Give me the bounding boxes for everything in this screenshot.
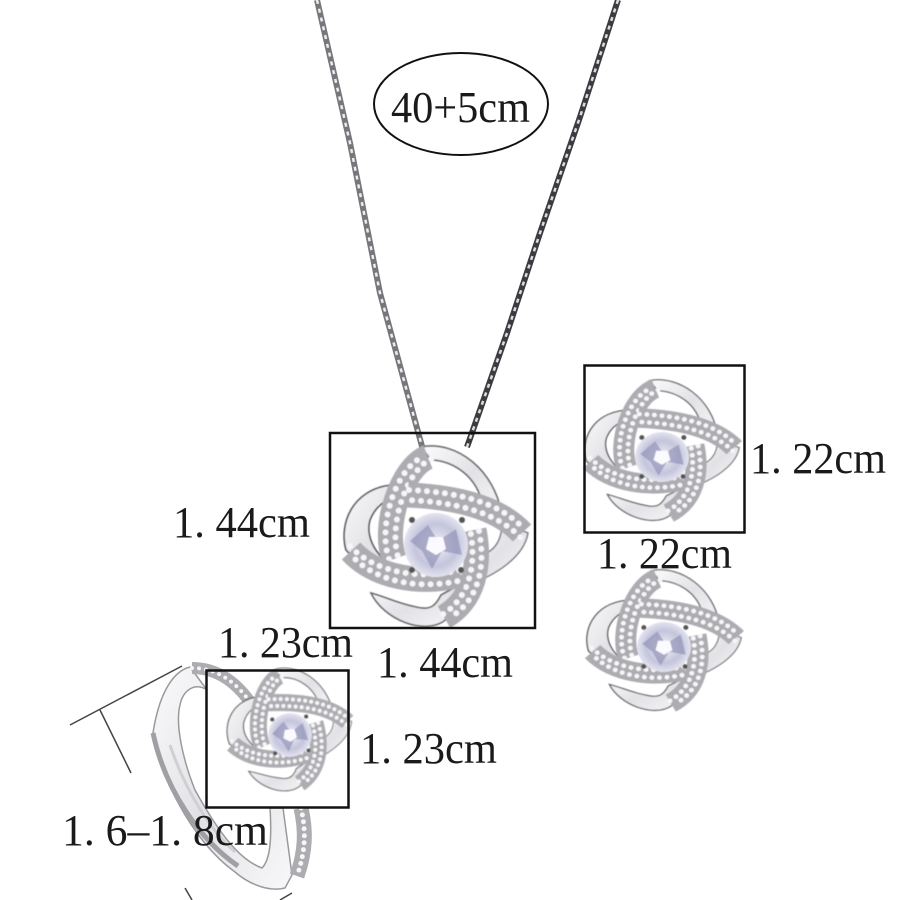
necklace chain [317,0,618,450]
earring bottom label: 1. 22cm [597,529,732,578]
ring diameter label: 1. 6–1. 8cm [62,806,268,855]
pendant with size box [330,433,535,628]
ring size box top label: 1. 23cm [218,618,353,667]
ring diameter bracket lines [70,666,292,900]
ring [153,662,357,889]
pendant width label: 1. 44cm [173,498,310,547]
earring side label: 1. 22cm [750,434,886,483]
pendant height label: 1. 44cm [377,638,513,687]
length callout: 40+5cm [374,53,548,155]
second earring [587,570,741,710]
earring with size box [584,366,744,532]
ring size box side label: 1. 23cm [360,724,497,773]
length callout: 40+5cm: 40+5cm [391,83,530,132]
